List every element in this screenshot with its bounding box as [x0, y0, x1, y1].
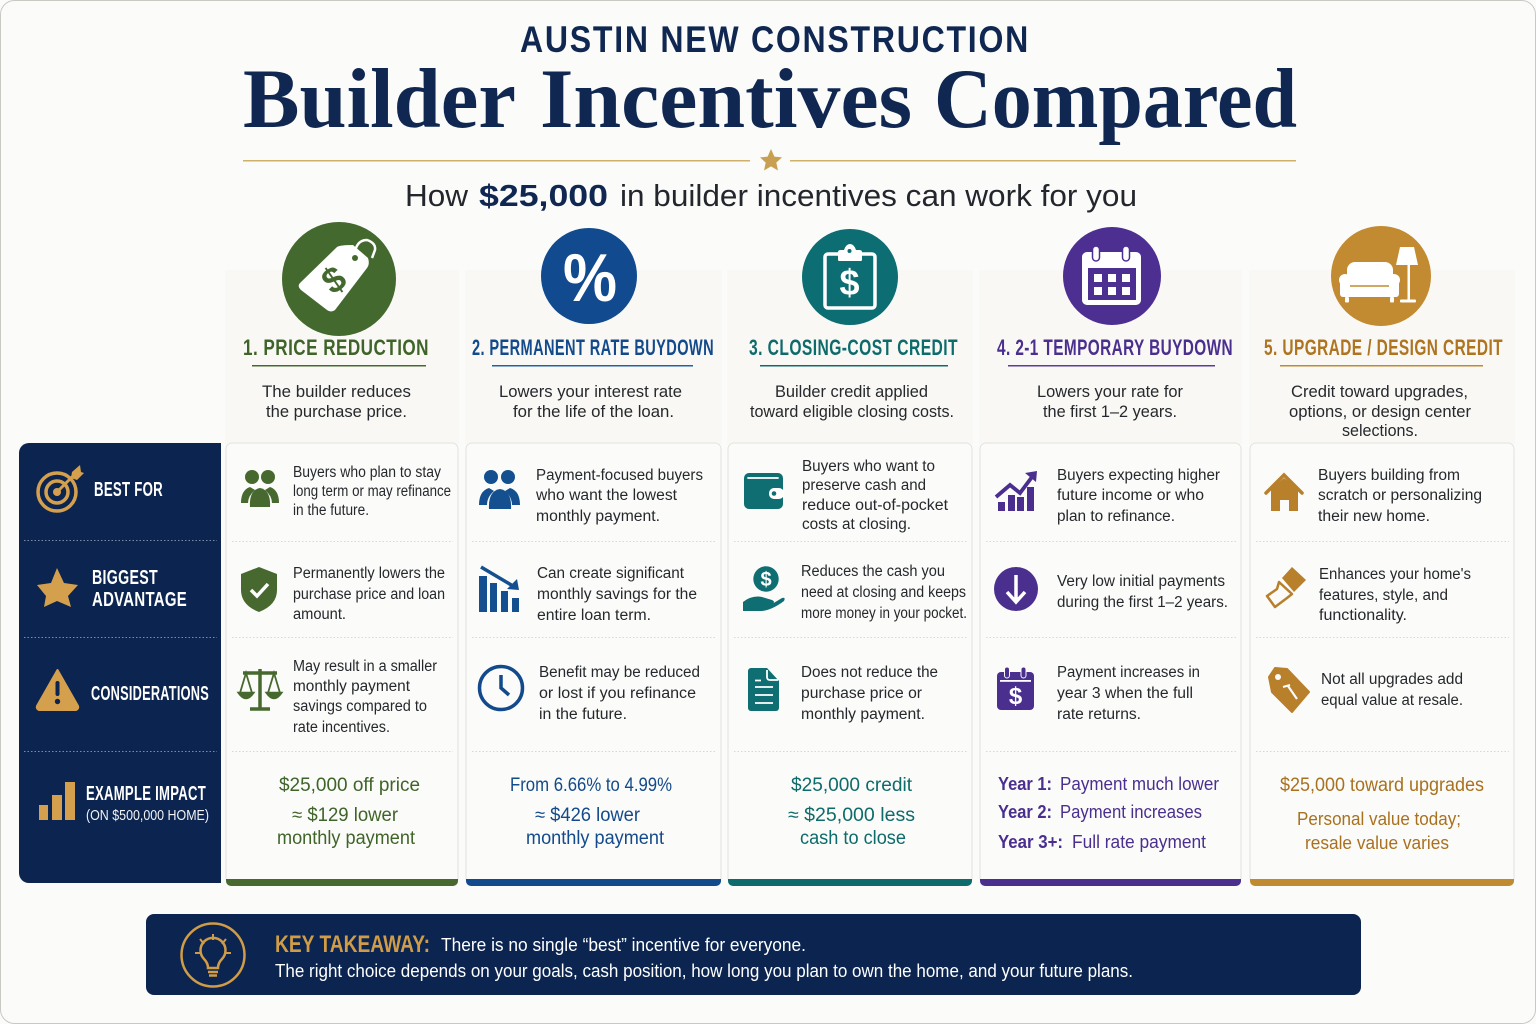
biggest advantage text: more money in your pocket. [801, 605, 967, 622]
best for text: long term or may refinance [293, 483, 451, 500]
biggest advantage text [537, 565, 697, 624]
considerations text [801, 664, 938, 723]
icon: down arrow circle [994, 567, 1038, 611]
icon: people [479, 470, 520, 509]
best for text [293, 464, 451, 519]
card [466, 443, 721, 886]
example impact [510, 775, 672, 849]
example impact: From 6.66% to 4.99% [510, 775, 672, 796]
icon: house [1266, 475, 1302, 511]
best for text: plan to refinance. [1057, 508, 1175, 525]
subtitle: in builder incentives can work for you [620, 178, 1137, 213]
best for text: future income or who [1057, 487, 1204, 504]
icon: falling bar chart [479, 567, 519, 612]
biggest advantage text: amount. [293, 606, 346, 623]
example impact: resale value varies [1305, 833, 1449, 853]
key takeaway banner [146, 914, 1361, 995]
icon: balance scale [239, 669, 281, 709]
best for text [535, 467, 703, 525]
icon: tag [1269, 668, 1309, 712]
description: for the life of the loan. [513, 402, 674, 421]
icon: bars [39, 782, 75, 820]
description: Lowers your rate for [1037, 382, 1183, 401]
description: The builder reduces [262, 382, 411, 401]
best for text: Buyers who plan to stay [293, 464, 441, 481]
main title [243, 52, 1297, 146]
icon: price tag [282, 222, 396, 336]
biggest advantage text: need at closing and keeps [801, 584, 966, 601]
best for text [802, 458, 949, 533]
description: Credit toward upgrades, [1291, 382, 1468, 401]
column 4: 2-1 temporary buydown [980, 227, 1241, 886]
biggest advantage text: functionality. [1319, 607, 1407, 624]
example impact: Full rate payment [1072, 832, 1206, 852]
considerations text: purchase price or [801, 685, 922, 702]
heading: 3. CLOSING-COST CREDIT [749, 335, 958, 360]
icon: paint brush [1267, 567, 1306, 607]
considerations text: in the future. [539, 706, 627, 723]
label: example impact: EXAMPLE IMPACT [86, 783, 206, 805]
example impact: ≈ $129 lower [292, 805, 399, 826]
title block [243, 19, 1297, 213]
best for text: costs at closing. [802, 516, 911, 533]
description: options, or design center [1289, 402, 1471, 421]
description: selections. [1342, 421, 1418, 440]
considerations text: or lost if you refinance [539, 685, 696, 702]
label: best for: BEST FOR [94, 479, 163, 501]
column 3: closing-cost credit [728, 229, 972, 886]
takeaway text: KEY TAKEAWAY: [275, 931, 430, 958]
biggest advantage text: Can create significant [537, 565, 685, 582]
card [728, 443, 972, 886]
subtitle: $25,000 [479, 178, 608, 213]
considerations text [1057, 664, 1200, 723]
biggest advantage text: Reduces the cash you [801, 563, 945, 580]
description [499, 382, 682, 421]
example impact: Payment much lower [1060, 774, 1219, 794]
considerations text [1321, 671, 1463, 709]
example impact: Payment increases [1060, 802, 1202, 822]
icon: hand with coin [743, 566, 785, 611]
label: biggest advantage [92, 567, 187, 611]
takeaway text: There is no single “best” incentive for everyone. [441, 935, 806, 955]
icon: shield check [241, 567, 277, 612]
icon: calendar dollar [997, 667, 1034, 710]
column 5: upgrade / design credit [1250, 226, 1514, 886]
icon: clock [480, 666, 522, 710]
icon: percent [541, 228, 637, 324]
description: the purchase price. [266, 402, 407, 421]
example impact [277, 775, 420, 849]
considerations text: rate returns. [1057, 706, 1141, 723]
considerations text: savings compared to [293, 698, 427, 715]
card [226, 443, 458, 886]
best for text: Payment-focused buyers [536, 467, 703, 484]
example impact: $25,000 credit [791, 775, 913, 796]
icon: clipboard dollar: $ [839, 262, 860, 303]
icon: document [748, 668, 779, 711]
icon: light bulb [182, 924, 244, 986]
icon: wallet [744, 473, 784, 509]
icon: hand with coin: $ [760, 569, 772, 591]
considerations text: monthly payment. [801, 706, 925, 723]
card [980, 443, 1241, 886]
description [1289, 382, 1471, 440]
considerations text: Benefit may be reduced [539, 664, 700, 681]
heading: 1. PRICE REDUCTION [243, 335, 429, 360]
example impact: monthly payment [526, 828, 665, 849]
label: example impact: (ON $500,000 HOME) [86, 808, 209, 824]
example impact: Year 3+: [998, 832, 1063, 852]
best for text: Buyers building from [1318, 467, 1460, 484]
best for text: who want the lowest [535, 487, 678, 504]
best for text: monthly payment. [536, 508, 660, 525]
icon: sofa and lamp [1331, 226, 1431, 326]
best for text: reduce out-of-pocket [802, 497, 949, 514]
example impact: $25,000 toward upgrades [1280, 775, 1484, 796]
main title: Incentives [540, 52, 912, 146]
column 2: permanent rate buydown [466, 228, 721, 886]
best for text [1318, 467, 1482, 525]
icon: rising bar chart [996, 471, 1037, 511]
considerations text [539, 664, 700, 723]
biggest advantage text: purchase price and loan [293, 586, 445, 603]
description: toward eligible closing costs. [750, 402, 954, 421]
biggest advantage text: during the first 1–2 years. [1057, 594, 1228, 611]
example impact: Year 1: [998, 774, 1052, 794]
icon: clipboard dollar [802, 229, 898, 325]
example impact: $25,000 off price [279, 775, 420, 796]
considerations text: May result in a smaller [293, 658, 437, 675]
label: biggest advantage: ADVANTAGE [92, 589, 187, 611]
considerations text [293, 658, 437, 736]
heading: 2. PERMANENT RATE BUYDOWN [472, 335, 714, 360]
best for text: scratch or personalizing [1318, 487, 1482, 504]
icon: star [37, 568, 78, 607]
considerations text: rate incentives. [293, 719, 390, 736]
example impact: ≈ $25,000 less [788, 805, 915, 826]
considerations text: year 3 when the full [1057, 685, 1193, 702]
column 1: price reduction [226, 222, 458, 886]
example impact: monthly payment [277, 828, 416, 849]
description [1037, 382, 1183, 421]
takeaway text [275, 931, 1133, 981]
biggest advantage text [1057, 573, 1228, 611]
icon: price tag: $ [314, 257, 354, 302]
description [750, 382, 954, 421]
icon: calendar dollar: $ [1009, 683, 1023, 710]
considerations text: Does not reduce the [801, 664, 938, 681]
best for text: Buyers who want to [802, 458, 935, 475]
example impact: ≈ $426 lower [535, 805, 641, 826]
biggest advantage text: Enhances your home's [1319, 566, 1471, 583]
star ornament [760, 149, 782, 170]
heading: 4. 2-1 TEMPORARY BUYDOWN [997, 335, 1233, 360]
subtitle [405, 178, 1137, 213]
icon: target [38, 465, 84, 511]
best for text: in the future. [293, 502, 369, 519]
icon: warning [37, 670, 78, 710]
biggest advantage text [801, 563, 967, 622]
example impact: Personal value today; [1297, 809, 1461, 829]
label: example impact [86, 783, 209, 824]
main title: Builder [243, 52, 516, 146]
biggest advantage text: Permanently lowers the [293, 565, 445, 582]
example impact [1280, 775, 1484, 853]
best for text: preserve cash and [802, 477, 926, 494]
icon: people [241, 470, 279, 507]
best for text: their new home. [1318, 508, 1430, 525]
biggest advantage text: features, style, and [1319, 587, 1448, 604]
description: the first 1–2 years. [1043, 402, 1177, 421]
biggest advantage text: monthly savings for the [537, 586, 697, 603]
icon: calendar [1063, 227, 1161, 325]
label: considerations: CONSIDERATIONS [91, 683, 209, 705]
label: biggest advantage: BIGGEST [92, 567, 158, 589]
description [262, 382, 411, 421]
best for text: Buyers expecting higher [1057, 467, 1220, 484]
biggest advantage text [293, 565, 445, 623]
considerations text: Payment increases in [1057, 664, 1200, 681]
example impact [788, 775, 915, 849]
biggest advantage text: Very low initial payments [1057, 573, 1225, 590]
description: Builder credit applied [775, 382, 928, 401]
best for text [1057, 467, 1220, 525]
left row-label panel [19, 443, 221, 883]
considerations text: monthly payment [293, 678, 411, 695]
example impact: cash to close [800, 828, 906, 849]
takeaway text: The right choice depends on your goals, cash position, how long you plan to own the home, and your future plans. [275, 961, 1133, 981]
eyebrow heading: AUSTIN NEW CONSTRUCTION [520, 19, 1030, 60]
considerations text: Not all upgrades add [1321, 671, 1463, 688]
biggest advantage text: entire loan term. [537, 607, 651, 624]
card [1250, 443, 1514, 886]
biggest advantage text [1319, 566, 1471, 624]
description: Lowers your interest rate [499, 382, 682, 401]
main title: Compared [934, 52, 1297, 146]
example impact: Year 2: [998, 802, 1052, 822]
considerations text: equal value at resale. [1321, 692, 1463, 709]
column header backgrounds [225, 270, 1515, 444]
icon: percent: % [563, 240, 617, 316]
example impact [998, 774, 1219, 852]
subtitle: How [405, 178, 469, 213]
